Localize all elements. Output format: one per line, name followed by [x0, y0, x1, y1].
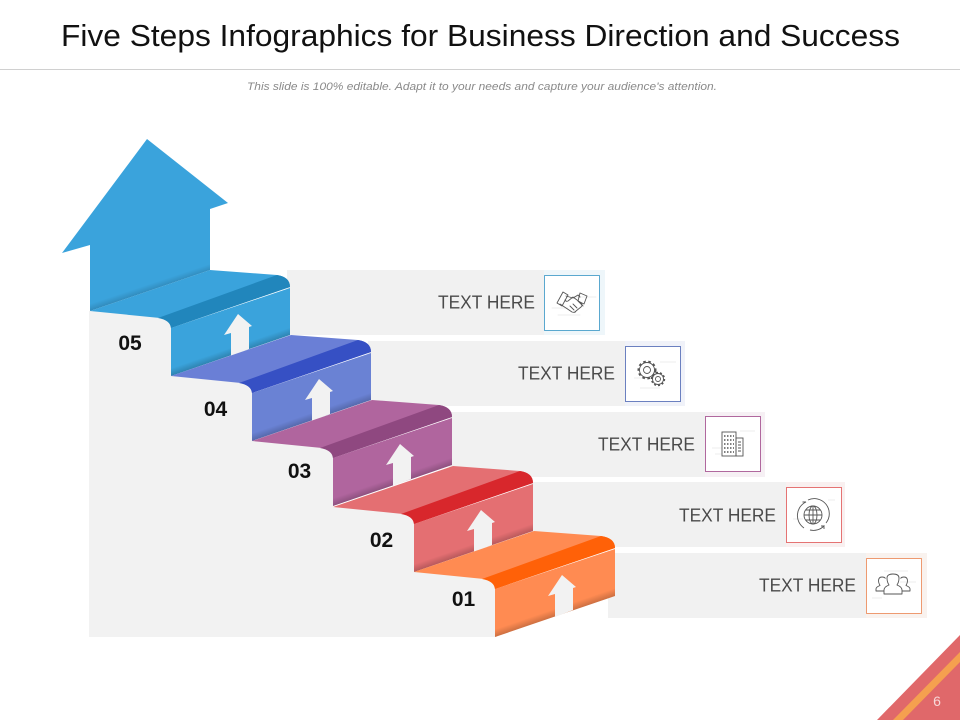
- number 05: 05: [118, 332, 142, 355]
- number 04: 04: [204, 398, 227, 421]
- title: Five Steps Infographics for Business Direction and Success: [61, 18, 900, 53]
- row 2 label: TEXT HERE: [679, 504, 776, 526]
- big arrow head of step 5: [62, 139, 228, 311]
- row 5 label: TEXT HERE: [438, 292, 535, 312]
- step 2: [333, 466, 533, 572]
- number 03: 03: [288, 460, 311, 483]
- row 5: text bar: [287, 270, 605, 335]
- icon: handshake: [544, 276, 600, 330]
- step 1: [414, 531, 615, 637]
- icon: buildings: [706, 416, 760, 472]
- row 1: text bar: [608, 553, 927, 618]
- row 2: text bar: [530, 482, 845, 547]
- icon: people: [866, 558, 922, 614]
- row 3 label: TEXT HERE: [598, 434, 695, 454]
- icon: globe with arrows: [786, 488, 842, 542]
- step 3: [252, 400, 452, 506]
- page number: 6: [933, 693, 941, 709]
- row 3: text bar: [449, 412, 765, 477]
- icon: gears: [626, 346, 680, 402]
- step 4: [171, 335, 371, 441]
- staircase background: [89, 311, 497, 637]
- corner decoration: [877, 635, 960, 720]
- number 01: 01: [452, 588, 475, 611]
- row 4 label: TEXT HERE: [518, 362, 615, 384]
- step 5: [90, 270, 290, 376]
- number 02: 02: [370, 529, 393, 552]
- row 1 label: TEXT HERE: [759, 574, 856, 596]
- subtitle: This slide is 100% editable. Adapt it to your needs and capture your audience's attention.: [247, 81, 717, 93]
- row 4: text bar: [368, 341, 685, 406]
